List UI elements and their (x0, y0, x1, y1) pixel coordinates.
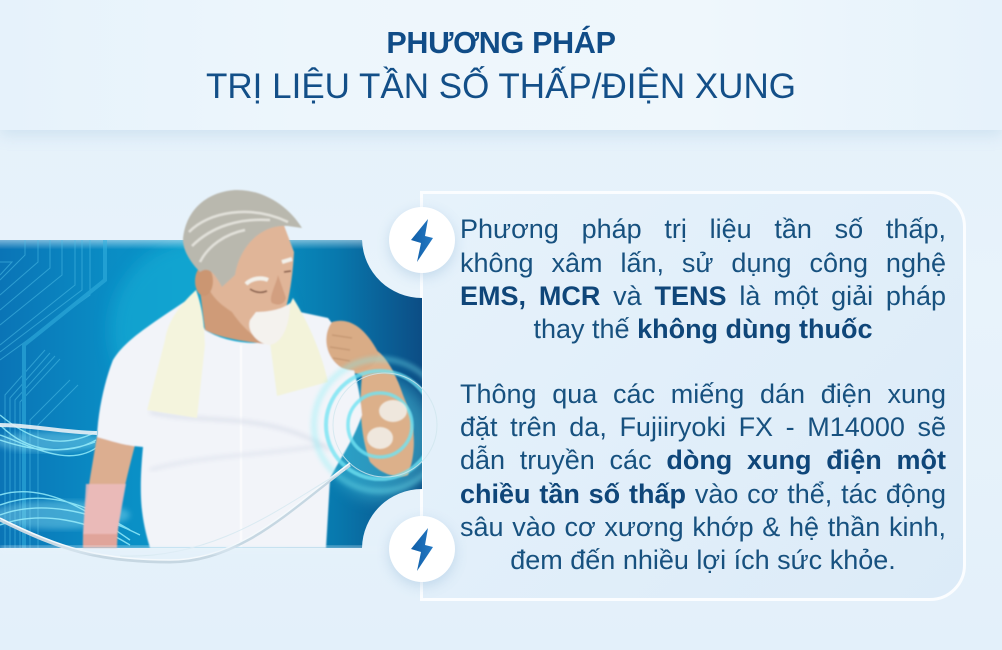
eyebrows and eyes (246, 259, 292, 284)
figure (83, 190, 414, 548)
background panel with circuit (0, 240, 435, 550)
text: không xâm lấn, sử dụng công nghệ (460, 248, 946, 278)
text: EMS, MCR và TENS là một giải pháp (460, 281, 946, 311)
text: đặt trên da, Fujiiryoki FX - M14000 sẽ (460, 412, 946, 442)
badge: bottom (389, 516, 455, 582)
circuit lines (0, 240, 105, 550)
photo illustration: man with electrotherapy patches (0, 189, 438, 564)
neck (200, 290, 275, 345)
text: chiều tần số thấp vào cơ thể, tác động (460, 479, 946, 509)
hair (183, 190, 302, 287)
soft bottom fade (0, 546, 420, 554)
ear (195, 266, 213, 296)
text: Thông qua các miếng dán điện xung (460, 379, 946, 409)
beard (249, 303, 290, 345)
text: Phương pháp trị liệu tần số thấp, (460, 214, 946, 244)
text: thay thế không dùng thuốc (533, 314, 873, 344)
arm glow (332, 376, 422, 506)
glow waves (0, 415, 140, 545)
panel: text card (420, 191, 966, 601)
white waves (0, 425, 350, 562)
right arm (350, 350, 414, 477)
title line 1: PHƯƠNG PHÁP (386, 26, 616, 60)
icon: lightning bolt (411, 528, 433, 571)
header band (0, 0, 1002, 130)
paragraph 2 (460, 379, 946, 575)
towel left (147, 290, 205, 418)
icon: lightning bolt (411, 219, 433, 262)
paragraph 1 (460, 214, 946, 344)
shirt (97, 298, 362, 548)
fist (326, 321, 378, 371)
left arm (83, 436, 135, 548)
text: đem đến nhiều lợi ích sức khỏe. (510, 545, 896, 575)
pulse rings (314, 359, 446, 491)
text: dẫn truyền các dòng xung điện một (460, 445, 946, 475)
towel right (270, 298, 328, 396)
electro patches (367, 400, 407, 449)
text: sâu vào cơ xương khớp & hệ thần kinh, (460, 512, 946, 542)
nose (271, 275, 286, 305)
face (204, 215, 294, 341)
title line 2: TRỊ LIỆU TẦN SỐ THẤP/ĐIỆN XUNG (206, 67, 796, 106)
badge: top (389, 207, 455, 273)
